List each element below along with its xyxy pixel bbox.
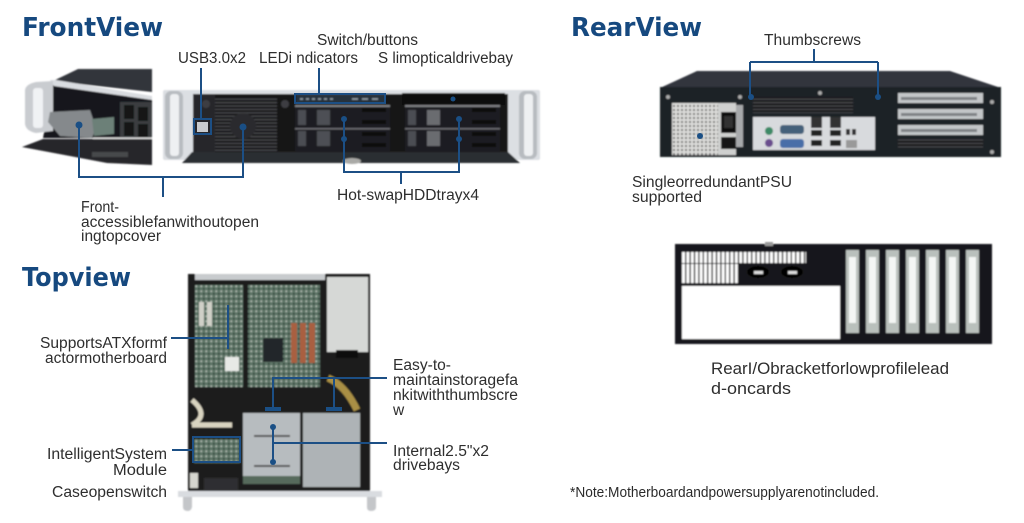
callout: thumbscrews <box>748 32 881 100</box>
callout: single or redundant PSU <box>632 133 792 206</box>
callout: hot-swap HDD tray x4: Hot-swapHDDtrayx4 <box>337 187 479 204</box>
callout: front-accessible fan: ingtopcover <box>81 228 161 245</box>
callout: thumbscrews: Thumbscrews <box>764 32 861 49</box>
callout: internal 2.5 inch x2 drive bays <box>270 424 489 474</box>
callout: internal 2.5 inch x2 drive bays: Internal2.5"x2 <box>393 443 489 460</box>
callout: USB 3.0 x2: USB3.0x2 <box>178 50 246 67</box>
callout: supports ATX form factor motherboard <box>40 302 243 367</box>
callout: case open switch: Caseopenswitch <box>52 484 167 501</box>
callout: easy-to-maintain storage fan kit: Easy-to- <box>393 357 451 374</box>
callout: slim optical drive bay <box>378 50 513 102</box>
callout: front-accessible fan: Front- <box>81 199 119 216</box>
photo: chassis rear <box>660 71 1001 157</box>
caption: rear I/O bracket <box>711 359 949 398</box>
callout: LED indicators <box>259 50 385 103</box>
caption: rear I/O bracket: d-oncards <box>711 379 791 398</box>
callout: hot-swap HDD tray x4 <box>337 116 479 204</box>
callout: internal 2.5 inch x2 drive bays: drivebays <box>393 457 460 474</box>
callout: slim optical drive bay: S limopticaldrivebay <box>378 50 513 67</box>
title: Top View: Topview <box>22 263 131 293</box>
callout: front-accessible fan: accessiblefanwithoutopen <box>81 214 259 231</box>
caption: rear I/O bracket: RearI/Obracketforlowprofilelead <box>711 359 949 378</box>
footnote: *Note:Motherboardandpowersupplyarenotincluded. <box>570 484 879 501</box>
callout: single or redundant PSU: supported <box>632 189 702 206</box>
callout: LED indicators: LEDi ndicators <box>259 50 358 67</box>
callout: intelligent system module <box>47 437 240 479</box>
callout: front-accessible fan <box>76 122 259 245</box>
callout: switch and buttons <box>317 32 418 94</box>
callout: single or redundant PSU: SingleorredundantPSU <box>632 174 792 191</box>
callout: intelligent system module: Module <box>113 462 167 479</box>
callout: intelligent system module: IntelligentSystem <box>47 446 167 463</box>
callout: easy-to-maintain storage fan kit: maintainstoragefa <box>393 372 518 389</box>
photo: front panel detail with fan module <box>22 69 152 165</box>
photo: chassis front <box>163 90 540 164</box>
callout: easy-to-maintain storage fan kit <box>265 357 518 419</box>
photo: chassis top <box>178 274 382 511</box>
callout: supports ATX form factor motherboard: actormotherboard <box>45 350 167 367</box>
callout: switch and buttons: Switch/buttons <box>317 32 418 49</box>
callout: easy-to-maintain storage fan kit: nkitwiththumbscre <box>393 387 518 404</box>
callout: easy-to-maintain storage fan kit: w <box>392 402 405 419</box>
callout: supports ATX form factor motherboard: SupportsATXformf <box>40 335 168 352</box>
callout: USB 3.0 x2 <box>178 50 246 134</box>
title: Rear View: RearView <box>571 13 702 43</box>
title: Front View: FrontView <box>22 13 163 43</box>
photo: rear I/O bracket <box>675 242 992 344</box>
